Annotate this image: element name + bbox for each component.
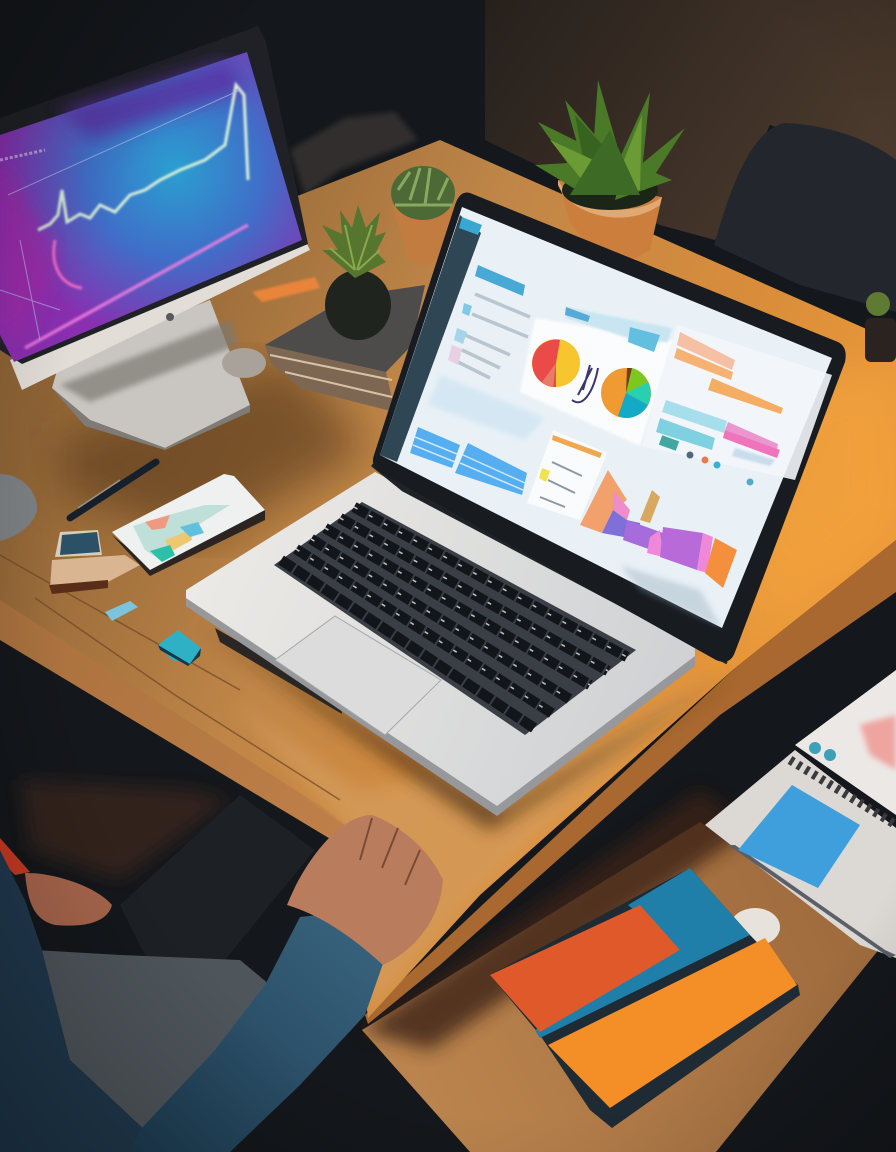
trackpad <box>275 616 441 735</box>
red cuff <box>0 838 30 875</box>
laptop <box>186 192 846 816</box>
laptop base <box>186 472 695 812</box>
desk lighting <box>60 360 896 1018</box>
orange bars <box>674 332 783 414</box>
left hand <box>25 873 112 926</box>
sidebar <box>380 215 481 462</box>
trousers dark <box>120 795 315 965</box>
blue sticky label <box>105 601 138 621</box>
blue bar charts <box>410 427 527 495</box>
display content <box>380 215 832 628</box>
trousers grey <box>35 950 270 1135</box>
small potted succulent <box>391 166 455 266</box>
laptop hinge <box>372 465 727 663</box>
laptop display <box>380 207 832 628</box>
blue sticky note <box>738 785 860 888</box>
top header band <box>566 307 672 342</box>
small desk object <box>222 348 266 378</box>
person <box>0 795 443 1152</box>
sidebar logo <box>459 217 482 235</box>
small chips <box>462 303 472 316</box>
monitor chart <box>0 60 248 348</box>
laptop front edge <box>186 598 695 816</box>
stacked area chart <box>580 470 737 588</box>
plant leaves <box>535 80 685 200</box>
laptop shadow <box>200 625 740 830</box>
pie chart left <box>532 339 580 387</box>
wallet and card <box>49 530 140 594</box>
pie chart right <box>601 368 651 418</box>
book stack <box>490 868 800 1128</box>
laptop underside <box>215 628 342 714</box>
laptop lid bezel <box>373 192 846 662</box>
orange book <box>548 938 797 1108</box>
desk right edge <box>365 540 896 1024</box>
mouse <box>0 474 37 541</box>
torso <box>0 850 150 1152</box>
desk shadow left <box>60 360 370 540</box>
stand shadow <box>60 320 238 402</box>
teal eraser <box>158 630 201 666</box>
sunlight patch <box>766 388 887 622</box>
right panel <box>642 325 832 480</box>
right sleeve <box>130 912 385 1152</box>
monitor chin <box>10 240 310 390</box>
far right small plant <box>865 292 896 362</box>
pen <box>70 462 156 518</box>
light chart panel <box>428 375 545 440</box>
pie legend ribbon <box>572 365 598 402</box>
right hand <box>287 815 443 965</box>
monitor <box>0 26 310 450</box>
orange pen on desk <box>252 277 320 302</box>
top left blue header <box>475 265 525 296</box>
main desk top <box>0 140 896 1018</box>
background: floor left <box>20 780 230 880</box>
logo dot <box>166 313 174 321</box>
pink bars <box>723 422 780 466</box>
clutter behind desk <box>290 112 418 195</box>
text lines left <box>458 294 530 378</box>
table shadow under desk <box>362 790 750 1050</box>
blue bars <box>662 400 727 433</box>
icon row <box>659 435 754 486</box>
desk front edge <box>0 600 352 852</box>
glare on display bottom <box>620 565 722 628</box>
right notebook <box>705 670 896 958</box>
lower side table <box>362 822 880 1152</box>
central chart panel <box>520 318 673 446</box>
background: brown wall <box>485 0 896 240</box>
small plant on books <box>322 205 391 340</box>
blue book <box>535 868 750 1038</box>
desk mat outline <box>0 555 340 800</box>
large potted plant <box>535 80 685 262</box>
monitor bezel <box>0 26 308 364</box>
monitor stand <box>52 300 250 450</box>
keyboard <box>274 502 636 735</box>
round paper on table <box>730 908 780 946</box>
small report panel <box>527 430 607 520</box>
chair <box>714 123 896 312</box>
lit desk front <box>268 688 695 1012</box>
monitor screen <box>0 52 302 362</box>
stacked books with plant <box>265 285 425 412</box>
phone <box>112 474 265 576</box>
red orange book <box>490 905 680 1032</box>
